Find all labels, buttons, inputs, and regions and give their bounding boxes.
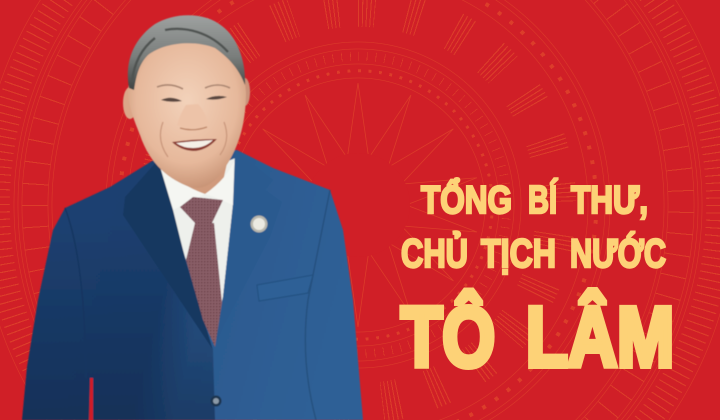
hair dark streaks — [132, 29, 228, 82]
breast pocket — [257, 275, 313, 301]
central star — [237, 83, 479, 327]
smile lines — [160, 122, 227, 157]
bird motif ring — [144, 0, 576, 420]
suit shading — [22, 215, 215, 420]
face — [128, 42, 246, 188]
inner dotted ring — [238, 69, 494, 341]
line two: Chủ tịch nước — [401, 230, 666, 276]
hair — [128, 15, 245, 90]
ear left — [123, 87, 137, 119]
sleeve seam right — [305, 190, 330, 420]
neck — [162, 140, 232, 194]
line one: Tổng Bí thư — [421, 177, 648, 222]
name: Tô Lâm — [401, 290, 674, 384]
shirt collar — [158, 157, 236, 210]
name: Tô Lâm: LÂM — [526, 290, 674, 384]
inner meander band — [244, 52, 512, 358]
left lapel — [123, 160, 213, 350]
line two: Chủ tịch nước: TỊCH — [481, 232, 556, 276]
sleeve seam left — [65, 208, 86, 378]
eyes — [161, 96, 227, 102]
nose — [177, 104, 209, 129]
arm gap — [89, 378, 93, 420]
teeth — [176, 140, 213, 148]
eyebrows — [157, 85, 230, 89]
line one: Tổng Bí thư: TỔNG — [421, 177, 512, 222]
line two: Chủ tịch nước: CHỦ — [401, 230, 468, 276]
line one: Tổng Bí thư: BÍ — [528, 178, 558, 222]
jacket button — [210, 396, 222, 406]
right lapel — [213, 150, 282, 350]
mouth — [172, 139, 217, 151]
line one: Tổng Bí thư: THƯ, — [571, 179, 648, 222]
ear right — [240, 78, 250, 106]
shirt — [158, 157, 238, 340]
lapel pin — [250, 216, 268, 232]
headline — [401, 177, 674, 384]
suit jacket — [22, 150, 363, 420]
name: Tô Lâm: TÔ — [401, 290, 495, 384]
dotted chain ring — [120, 0, 598, 420]
tie — [180, 197, 223, 347]
portrait of the man in navy suit — [22, 15, 363, 420]
line two: Chủ tịch nước: NƯỚC — [570, 230, 666, 276]
